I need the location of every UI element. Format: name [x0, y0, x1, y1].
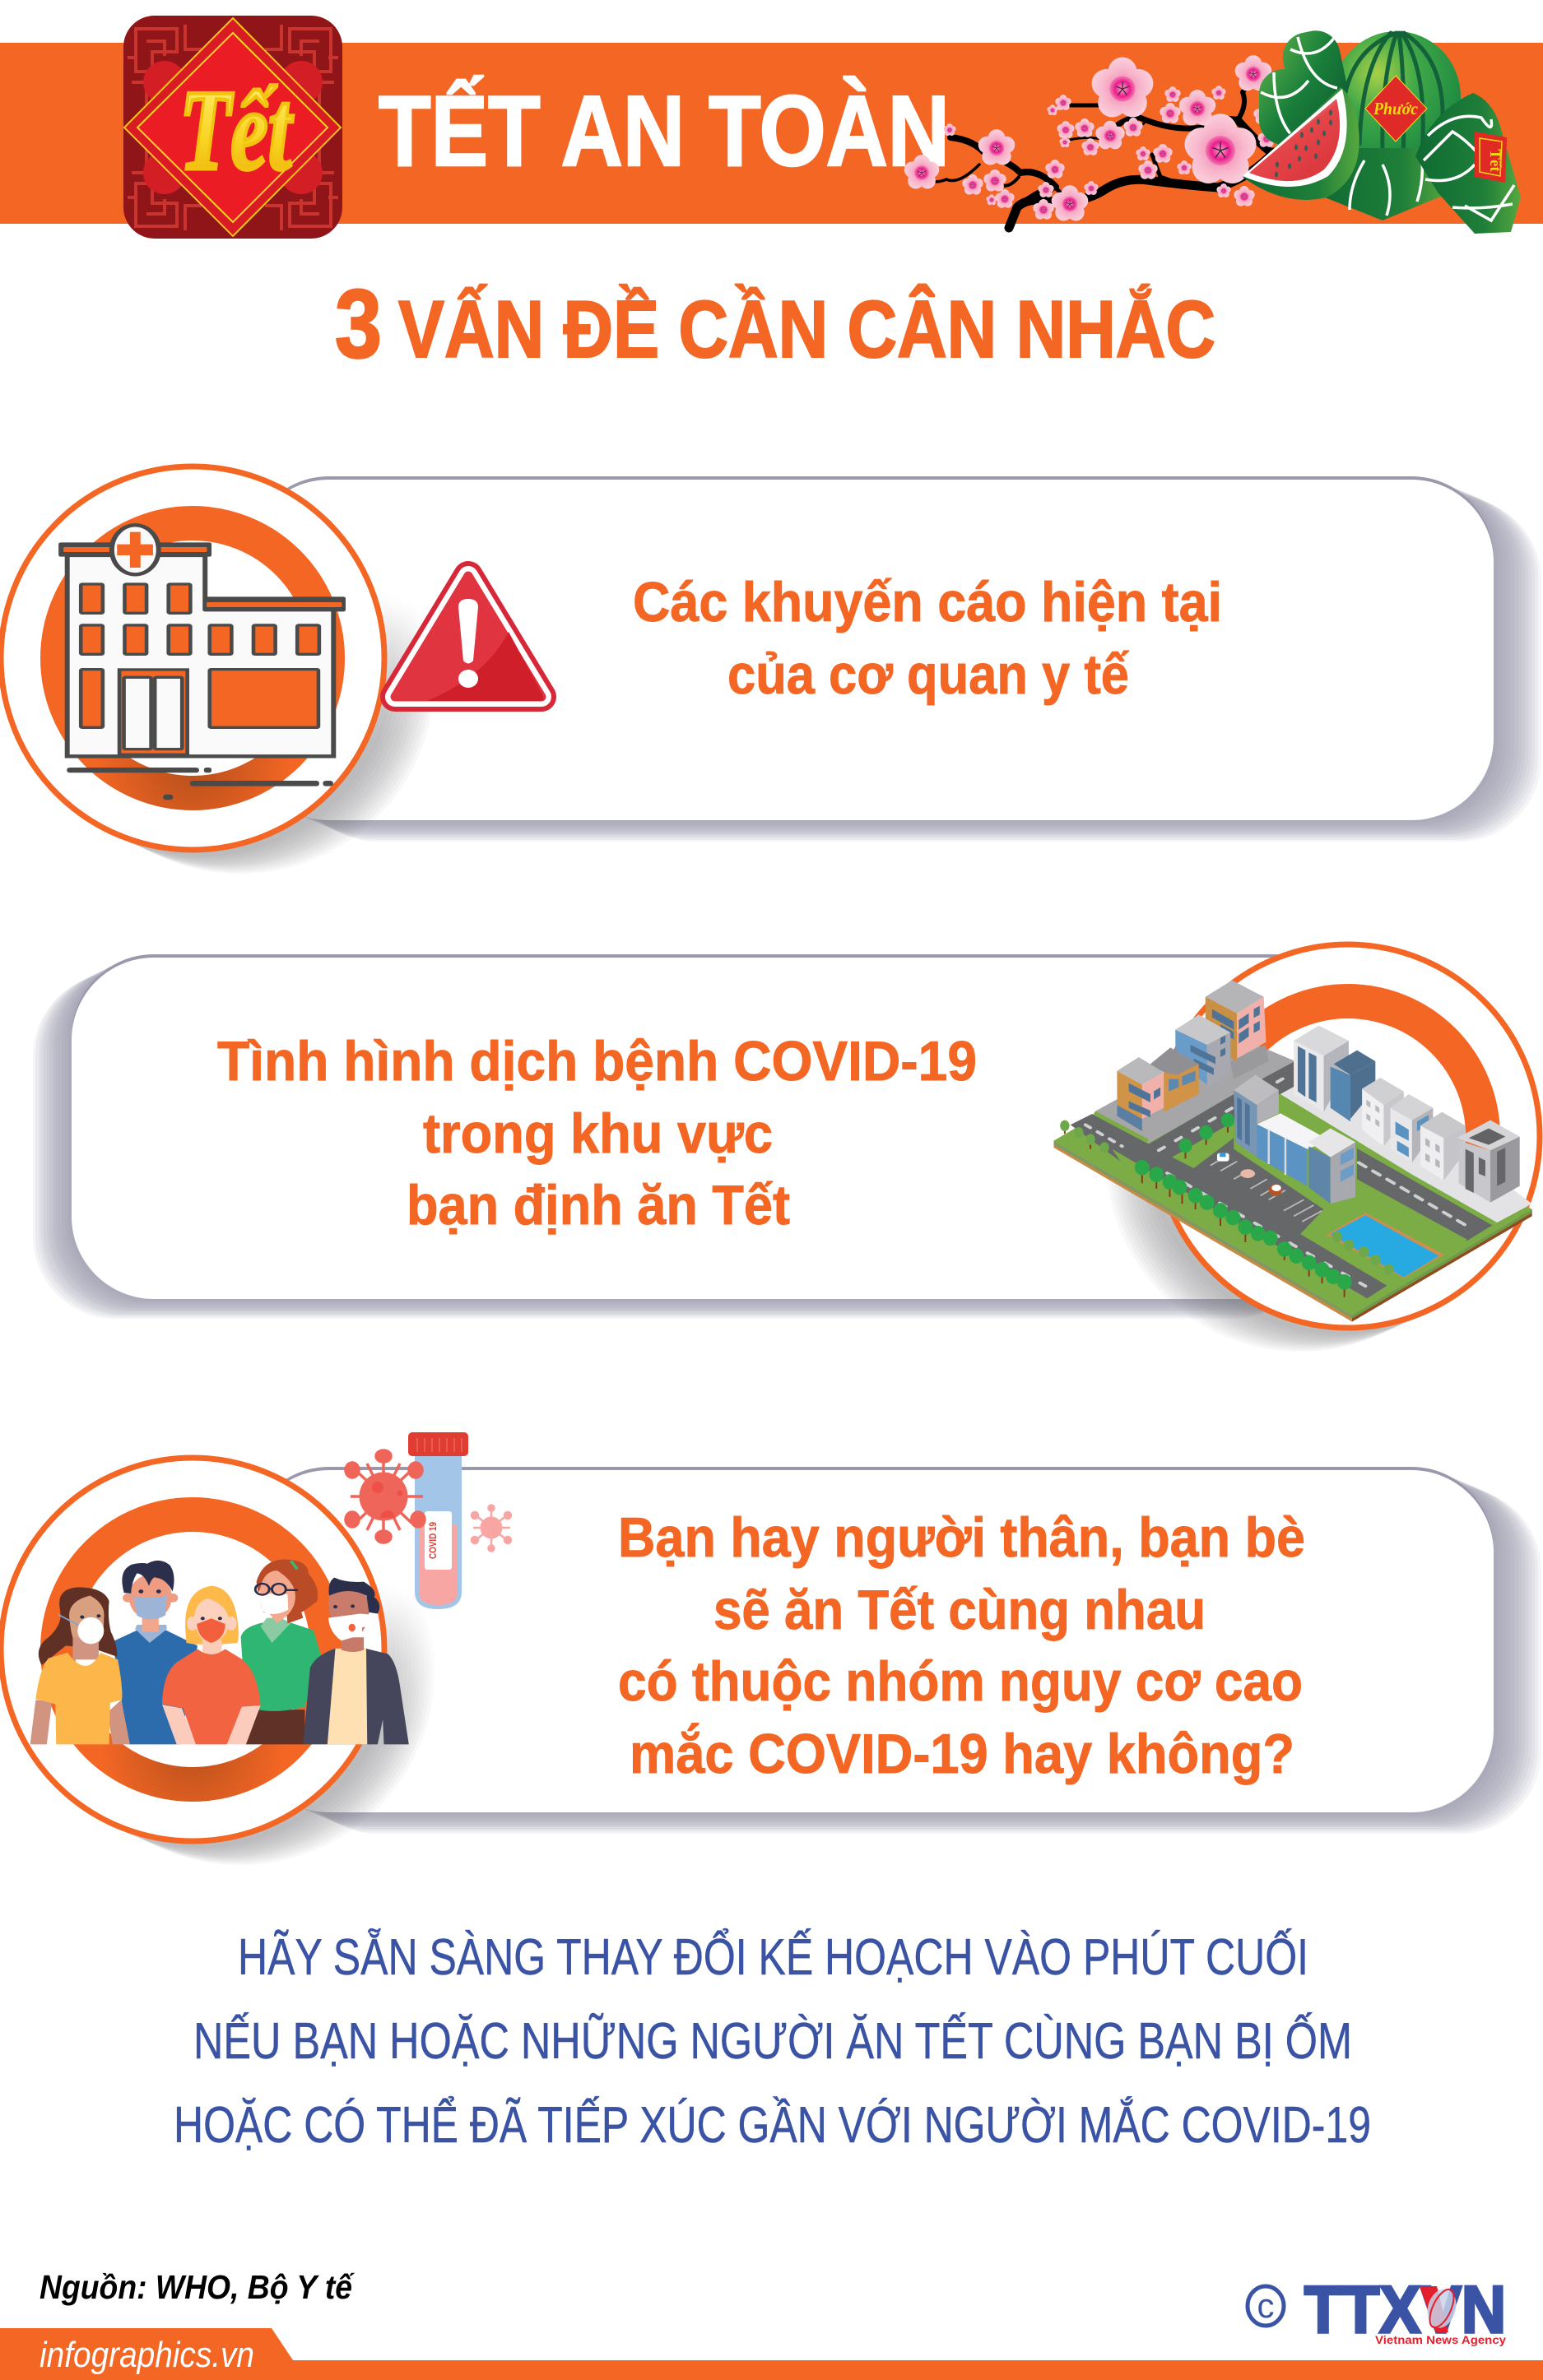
- icon: virus small: [472, 1505, 511, 1552]
- text: card 3 line 2: sẽ ăn Tết cùng nhau: [713, 1579, 1206, 1641]
- footer bar: [0, 2328, 1543, 2380]
- heading: 3 van de: [335, 270, 1215, 378]
- text: Phước label: Phước: [1373, 99, 1419, 118]
- hospital building: [58, 525, 346, 800]
- footer link: infographics.vn: [40, 2335, 254, 2375]
- trees: [1060, 1113, 1394, 1297]
- text: card 3 line 4: mắc COVID-19 hay không?: [630, 1722, 1294, 1785]
- icon: banh chung bottom: [1317, 148, 1448, 220]
- buildings: [1117, 981, 1520, 1204]
- text block: closing message: [174, 1928, 1371, 2154]
- panel: card 3: [247, 1467, 1541, 1834]
- text: Tết calligraphy: Tết: [179, 67, 294, 194]
- icon: banh tet rolls: [1259, 26, 1351, 145]
- isometric city: [1053, 981, 1532, 1322]
- title: TẾT AN TOÀN: [379, 75, 950, 187]
- logo letters: TTXVN: [1304, 2273, 1506, 2347]
- header band: [0, 43, 1543, 224]
- icon: warning triangle: [395, 576, 543, 701]
- copyright mark: c: [1257, 2286, 1274, 2325]
- icon: watermelon: [1332, 31, 1461, 163]
- icon: virus large: [346, 1450, 425, 1543]
- icon: Tết badge: [123, 16, 342, 239]
- icon: people medallion: [1, 1458, 435, 1865]
- icon: watermelon slice: [1243, 87, 1359, 200]
- person: green sweater woman: [241, 1560, 320, 1744]
- icon: city medallion: [1053, 944, 1540, 1352]
- icon: banh chung right: [1415, 93, 1521, 234]
- text: card 3 line 3: có thuộc nhóm nguy cơ cao: [618, 1650, 1303, 1713]
- text: tube label: COVID 19: [427, 1522, 439, 1559]
- text: card 1 line 2: của cơ quan y tế: [727, 643, 1129, 706]
- text: card 3 line 1: Bạn hay người thân, bạn bè: [618, 1506, 1305, 1569]
- copyright mark: [1248, 2286, 1284, 2326]
- line 1: HÃY SẴN SÀNG THAY ĐỔI KẾ HOẠCH VÀO PHÚT CUỐI: [238, 1928, 1308, 1986]
- icon: hospital medallion: [1, 466, 435, 874]
- text: card 1 line 1: Các khuyến cáo hiện tại: [633, 571, 1222, 633]
- heading: 3 van de: 3: [335, 270, 382, 378]
- logo: TTXVN: [1248, 2273, 1506, 2347]
- illustration: banh chung, watermelon: [1243, 26, 1521, 234]
- tagline: Vietnam News Agency: [1375, 2333, 1506, 2346]
- text: card 2 line 1: Tình hình dịch bệnh COVID-19: [217, 1030, 977, 1093]
- text: Tết label: Tết: [1486, 149, 1503, 172]
- people group: [30, 1560, 409, 1744]
- text: card 2 line 2: trong khu vực: [423, 1102, 773, 1165]
- person: orange shirt woman: [162, 1586, 261, 1744]
- icon: test tube: [408, 1432, 468, 1609]
- panel: card 1: [247, 476, 1541, 842]
- heading: 3 van de: VẤN ĐỀ CẦN CÂN NHẮC: [398, 284, 1215, 374]
- panel: card 2: [33, 954, 1355, 1319]
- person: blue sweater man: [113, 1561, 198, 1744]
- person: dark jacket man: [303, 1578, 409, 1744]
- illustration: apricot blossom branch: [902, 55, 1276, 228]
- text: card 2 line 3: bạn định ăn Tết: [407, 1174, 790, 1236]
- source: Nguồn: WHO, Bộ Y tế: [40, 2268, 356, 2306]
- person: yellow shirt woman: [30, 1587, 130, 1744]
- globe and red V: [1420, 2285, 1461, 2332]
